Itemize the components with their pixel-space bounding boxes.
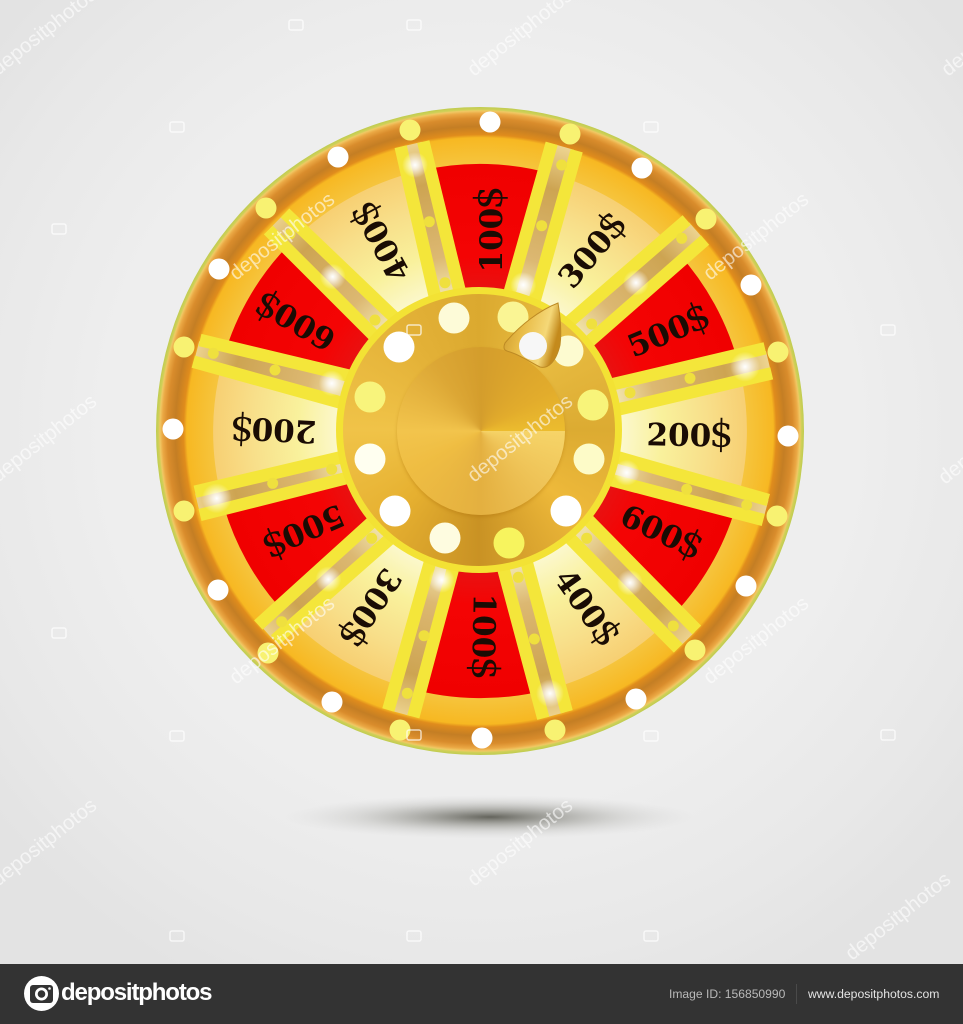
- watermarks: depositphotos: [699, 592, 813, 689]
- segment: 100$ top: [418, 164, 556, 431]
- logo icon: [24, 976, 59, 1011]
- segment: 400$ upper left: 400$: [339, 193, 419, 291]
- segment: 200$ left: [213, 358, 480, 498]
- hub: [336, 287, 622, 573]
- footer bar: [0, 964, 963, 1024]
- watermarks: depositphotos: [225, 592, 339, 689]
- divider studs: [208, 160, 752, 699]
- segment: 300$ lower left: 300$: [329, 561, 414, 657]
- segment: 400$ lower right: 400$: [546, 559, 632, 655]
- segment: 500$ lower left: [221, 431, 480, 615]
- segment: 300$ upper right: [480, 175, 674, 431]
- segment: 500$ upper right: [480, 249, 739, 431]
- segment: 100$ top: 100$: [467, 186, 511, 272]
- segment: 600$ upper left: [224, 239, 480, 431]
- logo wordmark: depositphotos: [61, 979, 211, 1006]
- watermarks: depositphotos: [841, 868, 955, 964]
- watermarks: depositphotos: [463, 390, 577, 487]
- pointer: [504, 303, 561, 367]
- divider strips: [197, 144, 768, 715]
- divider bars: [193, 142, 772, 718]
- segment: 600$ upper left: 600$: [245, 282, 343, 364]
- separator: [796, 984, 797, 1004]
- segment: 500$ upper right: 500$: [620, 292, 717, 366]
- segment: 100$ bottom: [408, 431, 548, 698]
- segment: 100$ bottom: 100$: [463, 593, 509, 681]
- segment: 500$ lower left: 500$: [255, 495, 352, 570]
- site url: www.depositphotos.com: [808, 987, 939, 1001]
- segment: 200$ right: 200$: [646, 410, 734, 456]
- segment: 200$ left: 200$: [228, 408, 317, 456]
- image id: Image ID: 156850990: [669, 987, 785, 1001]
- segment: 600$ lower right: 600$: [614, 492, 712, 569]
- divider sparkles: [202, 152, 760, 707]
- hub lights: [354, 302, 608, 558]
- segment: 300$ upper right: 300$: [546, 201, 636, 296]
- watermarks: depositphotos: [225, 188, 339, 285]
- segment: 400$ lower right: [480, 431, 669, 690]
- segment: 600$ lower right: [480, 431, 737, 620]
- rim lights: [162, 112, 798, 748]
- segment: 200$ right: [480, 368, 747, 502]
- segment: 400$ upper left: [295, 171, 480, 431]
- center knob: [397, 347, 565, 515]
- outer ring: [156, 107, 804, 755]
- watermarks: depositphotos: [463, 794, 577, 891]
- ground shadow: [322, 799, 658, 835]
- dividers: [193, 142, 772, 718]
- watermarks: depositphotos: [699, 188, 813, 285]
- segment: 300$ lower left: [286, 431, 480, 688]
